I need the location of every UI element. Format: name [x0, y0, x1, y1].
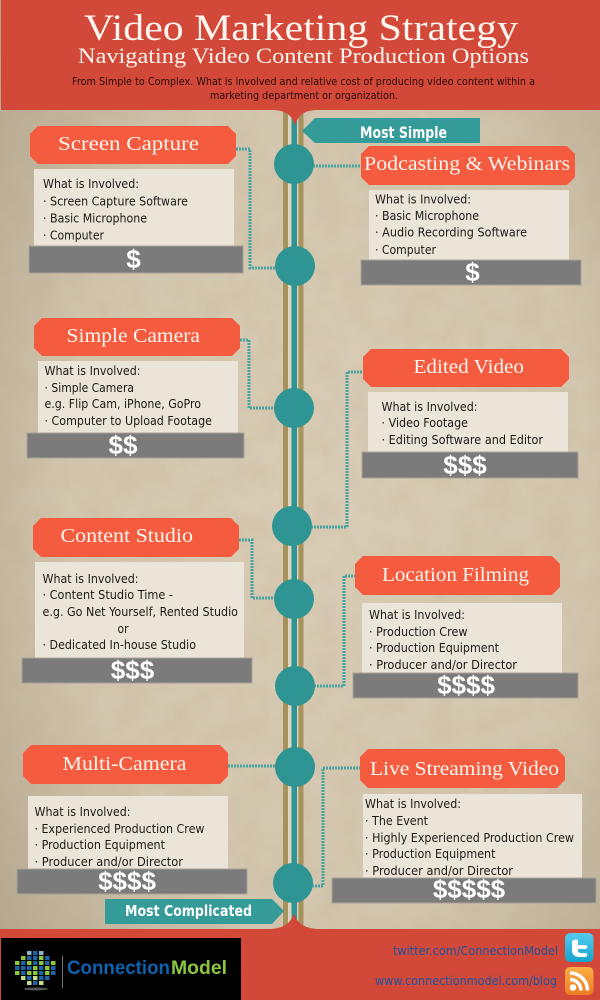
panel: podcasting and webinars: · Basic Microphone [375, 209, 479, 223]
panel: podcasting and webinars: Podcasting & Webinars [364, 153, 570, 175]
panel: location filming: What is Involved: [369, 608, 465, 622]
icon: twitter [565, 933, 594, 962]
panel: simple camera: e.g. Flip Cam, iPhone, GoPro [44, 397, 201, 411]
panel: multi-camera: What is Involved: [34, 805, 130, 819]
timeline nodes [272, 144, 315, 903]
panel: location filming: Location Filming [382, 564, 529, 586]
panel: live streaming video [332, 749, 596, 904]
panel: screen capture: · Screen Capture Software [43, 194, 188, 208]
footer links: twitter.com/ConnectionModel [393, 943, 558, 958]
connector lines [228, 149, 364, 886]
panel: multi-camera: · Experienced Production Crew [34, 822, 205, 836]
panel: edited video: · Editing Software and Editor [382, 433, 543, 447]
panel: live streaming video: · The Event [365, 814, 428, 828]
panel: location filming: · Production Crew [369, 625, 468, 639]
intro text: marketing department or organization. [210, 89, 398, 102]
panel: live streaming video: $$$$$ [433, 874, 506, 904]
panel: screen capture [29, 126, 243, 274]
arrow: most simple: Most Simple [360, 123, 447, 142]
panel: content studio [22, 518, 252, 685]
panel: edited video: Edited Video [414, 356, 524, 378]
arrow: most simple [302, 118, 480, 143]
panel: multi-camera: $$$$ [98, 866, 156, 896]
panel: location filming: $$$$ [437, 670, 495, 700]
panel: simple camera [27, 318, 244, 460]
footer links: www.connectionmodel.com/blog [375, 973, 557, 988]
panel: edited video [362, 349, 578, 480]
panel: simple camera: · Simple Camera [44, 381, 134, 395]
arrow: most complicated: Most Complicated [125, 902, 252, 920]
logo wordmark: Connection [67, 957, 170, 979]
panel: multi-camera: Multi-Camera [62, 753, 187, 775]
panel: simple camera: What is Involved: [44, 364, 140, 378]
icon: rss [565, 967, 594, 995]
panel: content studio: or [118, 622, 129, 636]
footer links [375, 943, 558, 988]
panel: multi-camera: · Producer and/or Director [34, 855, 183, 869]
panel: location filming: · Production Equipment [369, 641, 499, 655]
panel: multi-camera [17, 745, 247, 896]
panel: content studio: $$$ [111, 655, 155, 685]
panel: content studio: · Content Studio Time - [42, 588, 173, 602]
panel: live streaming video: · Producer and/or Director [365, 864, 513, 878]
arrow: most complicated [105, 899, 284, 924]
intro text [72, 75, 535, 102]
panel: live streaming video: What is Involved: [365, 797, 461, 811]
timeline stripes [283, 110, 304, 930]
panel: podcasting and webinars: What is Involved: [375, 192, 471, 206]
panel: podcasting and webinars: · Audio Recording Software [375, 226, 527, 240]
panel: simple camera: Simple Camera [66, 325, 200, 347]
panel: screen capture: · Computer [43, 228, 104, 242]
logo wordmark [67, 957, 227, 979]
panel: screen capture: · Basic Microphone [43, 212, 147, 226]
panel: simple camera: · Computer to Upload Footage [44, 414, 212, 428]
panel: content studio: · Dedicated In-house Studio [42, 638, 196, 652]
logo [1, 938, 241, 1000]
panel: edited video: $$$ [443, 450, 487, 480]
panel: edited video: · Video Footage [382, 416, 468, 430]
header banner [1, 0, 600, 126]
panel: live streaming video: Live Streaming Video [370, 758, 559, 780]
panel: content studio: Content Studio [60, 525, 193, 547]
panel: live streaming video: · Production Equipment [365, 847, 496, 861]
intro text: From Simple to Complex. What is involved and relative cost of producing video content within a [72, 75, 535, 88]
panel: screen capture: What is Involved: [43, 177, 139, 191]
panel: content studio: What is Involved: [42, 572, 138, 586]
panel: content studio: e.g. Go Net Yourself, Rented Studio [42, 605, 238, 619]
panel: simple camera: $$ [109, 430, 138, 460]
panel: multi-camera: · Production Equipment [34, 838, 165, 852]
panel: location filming: · Producer and/or Director [369, 658, 517, 672]
footer banner [0, 913, 600, 1000]
panel: podcasting and webinars: · Computer [375, 243, 436, 257]
logo mark [15, 951, 56, 990]
subtitle: Navigating Video Content Production Options [78, 43, 529, 68]
panel: podcasting and webinars [361, 146, 581, 287]
logo wordmark: Model [171, 957, 227, 979]
panel: live streaming video: · Highly Experienced Production Crew [365, 831, 574, 845]
title: Video Marketing Strategy [84, 8, 519, 49]
panel: screen capture: Screen Capture [58, 133, 199, 155]
panel: edited video: What is Involved: [382, 400, 478, 414]
panel: podcasting and webinars: $ [465, 257, 480, 287]
panel: screen capture: $ [126, 244, 141, 274]
panel: location filming [353, 556, 578, 700]
